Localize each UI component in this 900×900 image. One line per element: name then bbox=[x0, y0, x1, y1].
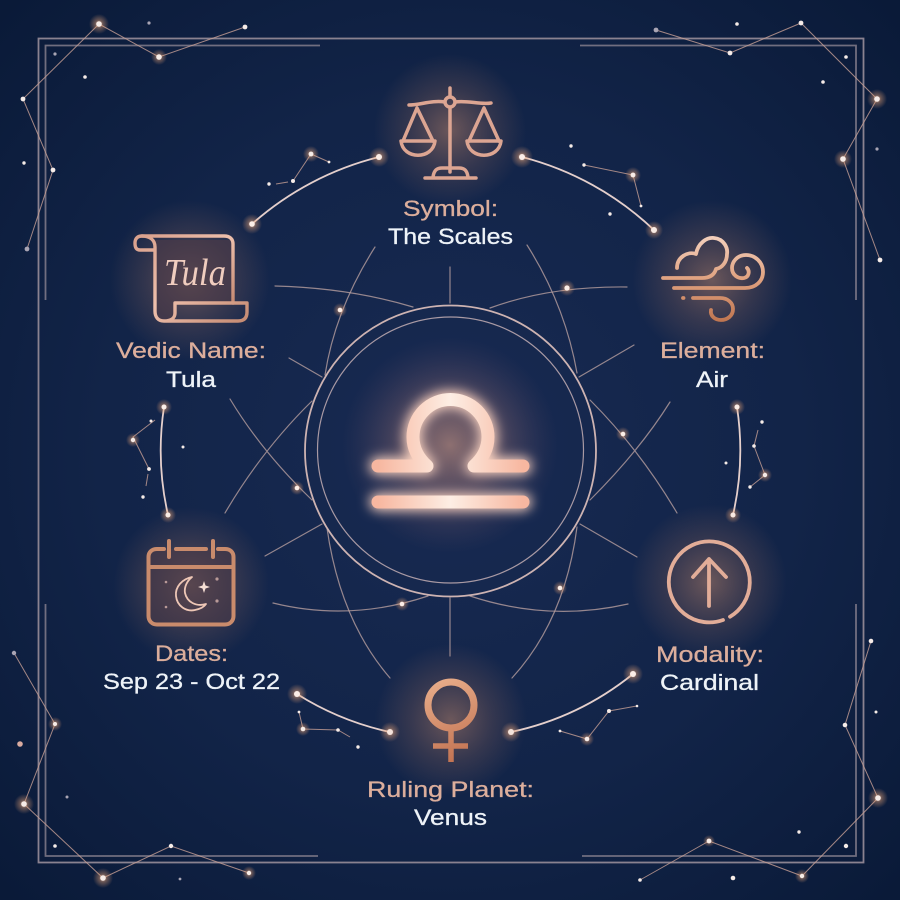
scroll script lettering: Tula bbox=[164, 252, 226, 294]
label: vedic name: Vedic Name: bbox=[116, 338, 266, 363]
value: air: Air bbox=[696, 367, 729, 392]
value: venus: Venus bbox=[414, 805, 487, 830]
panel: element bbox=[632, 200, 792, 392]
corner constellation: bottom left bbox=[12, 651, 256, 888]
icon: venus symbol bbox=[428, 682, 474, 762]
label: modality: Modality: bbox=[656, 642, 764, 667]
icon: scales bbox=[401, 88, 501, 178]
panel: dates bbox=[103, 507, 280, 694]
icon: libra glyph bbox=[378, 400, 523, 502]
icon: circled up arrow bbox=[669, 541, 750, 622]
panel: ruling planet bbox=[367, 644, 534, 830]
icon: scroll bbox=[135, 236, 247, 321]
glow behind libra glyph bbox=[378, 400, 523, 502]
connecting arcs between icons bbox=[156, 146, 745, 742]
label: dates: Dates: bbox=[155, 641, 228, 666]
small constellations around the wheel bbox=[126, 144, 772, 749]
panel: modality bbox=[631, 504, 787, 695]
corner constellation: top left bbox=[21, 14, 247, 251]
value: tula: Tula bbox=[166, 367, 217, 392]
corner constellation: bottom right bbox=[638, 639, 888, 883]
icon: wind and cloud bbox=[663, 238, 763, 320]
icon: calendar with moon bbox=[148, 541, 234, 624]
value: date range: Sep 23 - Oct 22 bbox=[103, 669, 280, 694]
panel: symbol bbox=[374, 54, 526, 249]
zodiac wheel lines bbox=[225, 245, 677, 678]
panel: vedic name bbox=[110, 200, 270, 392]
central libra emblem bbox=[305, 306, 596, 596]
value: cardinal: Cardinal bbox=[660, 670, 759, 695]
value: the scales: The Scales bbox=[388, 224, 513, 249]
corner constellation: top right bbox=[654, 21, 887, 262]
label: symbol: Symbol: bbox=[403, 196, 498, 221]
label: ruling planet: Ruling Planet: bbox=[367, 777, 534, 802]
label: element: Element: bbox=[660, 338, 765, 363]
